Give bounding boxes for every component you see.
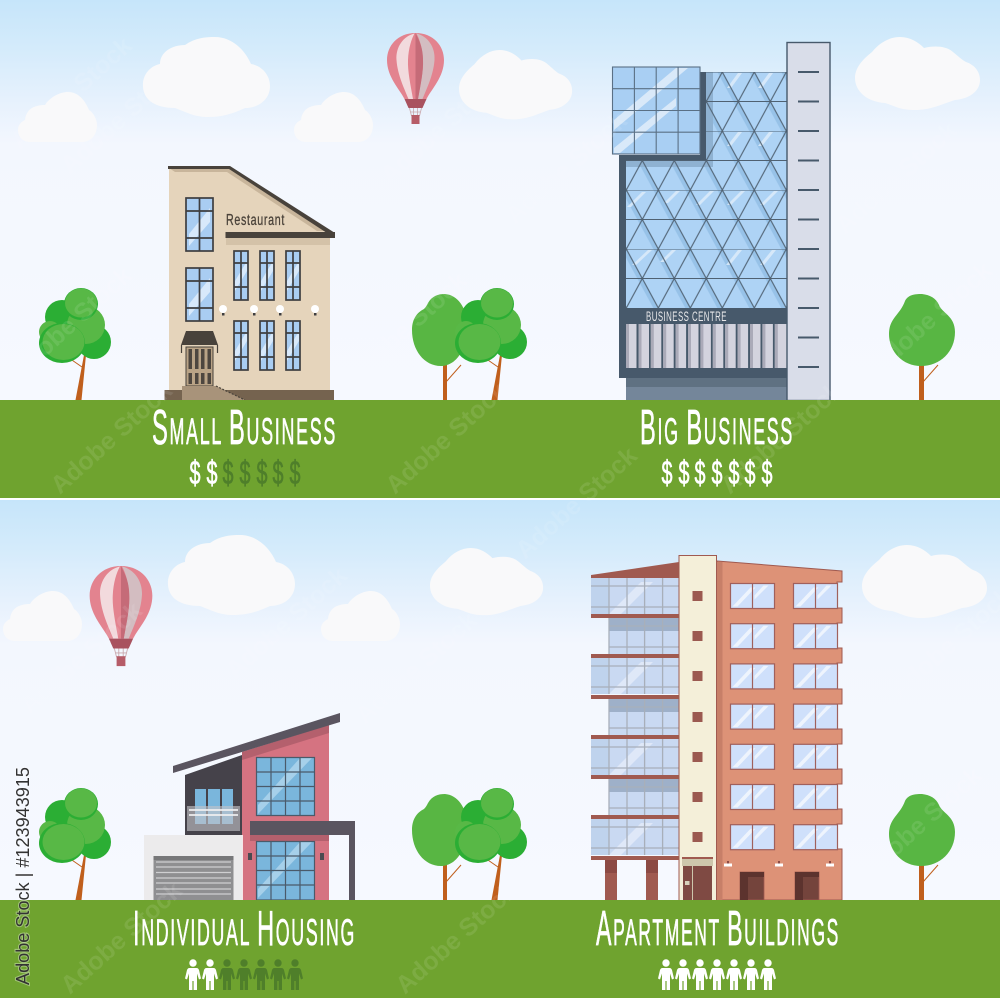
- watermark: Adobe Stock: [375, 66, 508, 189]
- rating: two of seven dollars: $: [256, 454, 268, 491]
- heading: big business: BIG BUSINESS: [640, 401, 794, 455]
- rating: two of seven dollars: $: [240, 454, 250, 491]
- icon: hot air balloon, top: [387, 33, 444, 124]
- rating: seven of seven dollars: $: [728, 454, 740, 491]
- rating: seven of seven dollars: $: [744, 454, 756, 491]
- entrance columns: [626, 324, 787, 368]
- watermark: Adobe Stock: [510, 441, 643, 564]
- business centre sign: BUSINESS CENTRE: [646, 309, 727, 324]
- panel: small and big business sky: [0, 0, 1000, 400]
- watermark: Adobe Stock: [390, 876, 523, 999]
- watermark: Adobe Stock: [865, 256, 998, 379]
- garage door: [154, 856, 234, 900]
- trees, bottom panel: [39, 788, 955, 900]
- watermark: Adobe Stock: [500, 106, 633, 229]
- panel: housing sky: [0, 500, 1000, 900]
- rating: seven of seven dollars: [662, 454, 772, 491]
- icon: hot air balloon, bottom: [90, 566, 152, 666]
- ground: top panel: [0, 400, 1000, 498]
- stock id label: Adobe Stock | #123943915: [13, 767, 33, 985]
- heading: individual housing: INDIVIDUAL HOUSING: [133, 902, 356, 956]
- heading: apartment buildings: APARTMENT BUILDINGS: [596, 902, 840, 956]
- watermark: Adobe Stock: [45, 376, 178, 499]
- rating: seven of seven dollars: $: [662, 454, 672, 491]
- restaurant sign: Restaurant: [226, 212, 285, 229]
- house lower window: [256, 841, 315, 900]
- watermark: Adobe Stock: [5, 261, 138, 384]
- watermark: Adobe Stock: [855, 761, 988, 884]
- building: apartments: [591, 556, 842, 900]
- watermark: Adobe Stock: [5, 31, 138, 154]
- watermark: Adobe Stock: [220, 561, 353, 684]
- ground: bottom panel: [0, 900, 1000, 998]
- watermark: Adobe Stock: [380, 376, 513, 499]
- watermark: Adobe Stock: [55, 876, 188, 999]
- watermark: Adobe Stock: [15, 596, 148, 719]
- heading: small business: SMALL BUSINESS: [152, 401, 337, 455]
- watermark: Adobe Stock: [55, 56, 188, 179]
- house upper window: [256, 757, 315, 816]
- building: modern house: [144, 713, 355, 900]
- rating: seven of seven dollars: $: [712, 454, 722, 491]
- rating: seven of seven dollars: $: [694, 454, 706, 491]
- rating: two of seven dollars: $: [290, 454, 300, 491]
- building: business centre: [612, 42, 830, 400]
- rating: seven of seven people: [658, 959, 776, 990]
- building: restaurant: [164, 166, 335, 400]
- watermark: Adobe Stock: [830, 116, 963, 239]
- rating: two of seven dollars: $: [206, 454, 218, 491]
- watermark: Adobe Stock: [350, 606, 483, 729]
- clouds, bottom panel: [3, 535, 987, 641]
- rating: two of seven dollars: [190, 454, 300, 491]
- watermark: Adobe Stock: [715, 376, 848, 499]
- clouds, top panel: [18, 37, 980, 142]
- rating: two of seven people: [185, 959, 303, 990]
- rating: seven of seven dollars: $: [678, 454, 690, 491]
- rating: two of seven dollars: $: [190, 454, 200, 491]
- trees, top panel: [39, 288, 955, 400]
- rating: two of seven dollars: $: [222, 454, 234, 491]
- watermark: Adobe Stock: [340, 266, 473, 389]
- rating: two of seven dollars: $: [272, 454, 284, 491]
- rating: seven of seven dollars: $: [762, 454, 772, 491]
